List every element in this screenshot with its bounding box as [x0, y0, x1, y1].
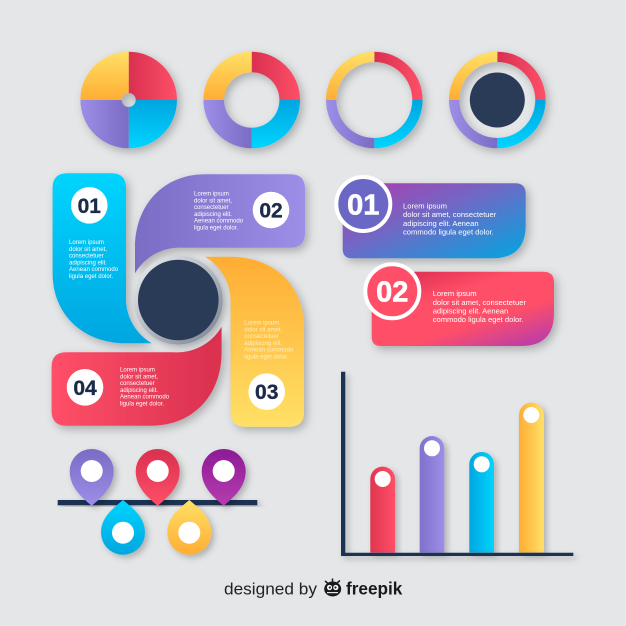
text: petal 01: consectetuer [69, 254, 104, 260]
panel text: dolor sit amet, consectetuer [403, 210, 497, 219]
text: petal 02: adipiscing elit. [194, 212, 232, 218]
badge 02: 02 [259, 200, 283, 222]
number badge [336, 177, 390, 231]
text: petal 03: Lorem ipsum [244, 320, 279, 326]
footer credit [224, 578, 403, 598]
bar: red [370, 467, 395, 552]
drop: blue [101, 500, 145, 555]
text: petal 02: Aenean commodo [194, 219, 244, 225]
badge 04: 04 [73, 377, 97, 400]
text: petal 04: dolor sit amet, [120, 374, 158, 380]
pinwheel chart [52, 173, 305, 427]
bar chart [341, 372, 573, 556]
donut 1: pie with small hole [80, 52, 177, 148]
text: petal 04: consectetuer [120, 381, 155, 387]
text: petal 03: dolor sit amet, [244, 327, 283, 333]
label panel 02 [365, 264, 554, 346]
panel text: Lorem ipsum [433, 289, 477, 298]
panel text: dolor sit amet, consectetuer [433, 298, 526, 307]
text: petal 02: dolor sit amet, [194, 198, 232, 204]
label panel 01 [336, 177, 526, 258]
petal 04: red [52, 327, 222, 426]
bar: blue [469, 452, 494, 552]
bar: purple [420, 436, 444, 552]
text: petal 04: adipiscing elit. [120, 388, 158, 394]
badge 03: 03 [255, 381, 278, 404]
axes [341, 372, 573, 556]
pin: violet [202, 449, 246, 506]
icon: freepik bee logo [324, 578, 341, 596]
text: petal 03: Aenean commodo [244, 348, 294, 354]
number badge: 02 [376, 277, 408, 309]
text: petal 04: ligula eget dolor. [120, 401, 164, 407]
donut 4: thin ring with dark centre [449, 52, 546, 148]
badge 01: 01 [78, 195, 101, 218]
freepik wordmark: freepik [346, 578, 403, 598]
text: petal 03: ligula eget dolor. [244, 354, 289, 360]
text: petal 02: ligula eget dolor. [194, 225, 238, 231]
text: petal 02: Lorem ipsum [194, 192, 229, 198]
text: petal 01: dolor sit amet, [69, 247, 107, 253]
text: petal 01: Lorem ipsum [69, 240, 104, 246]
text: petal 01: ligula eget dolor. [69, 274, 113, 280]
text: petal 04: Aenean commodo [120, 395, 170, 401]
badge 04 [67, 369, 103, 406]
timeline bar [58, 500, 257, 505]
donut 2: thick ring [203, 52, 300, 148]
donut 3: thin ring [326, 52, 423, 148]
designed by text: designed by [224, 580, 318, 598]
panel text: Lorem ipsum [403, 202, 447, 210]
badge 01 [71, 187, 108, 224]
bar: yellow [519, 403, 544, 552]
petal 01: blue [53, 173, 152, 343]
text: petal 02: consectetuer [194, 205, 229, 211]
text: petal 04: Lorem ipsum [120, 368, 155, 374]
pin: red [136, 449, 180, 506]
panel shape [372, 272, 554, 346]
petal 02: purple [135, 174, 305, 273]
number badge: 01 [347, 189, 379, 221]
text: petal 01: Aenean commodo [69, 267, 119, 273]
number badge [365, 264, 419, 318]
panel text: adipiscing elit. Aenean [403, 219, 479, 228]
petal 03: yellow [205, 257, 304, 427]
centre hub [134, 256, 223, 344]
drop: yellow [167, 500, 211, 555]
panel text: commodo ligula eget dolor. [433, 315, 523, 324]
map pin timeline [58, 449, 257, 555]
text: petal 03: adipiscing elit. [244, 341, 283, 347]
pin: purple [70, 449, 114, 506]
badge 02 [253, 192, 289, 228]
panel text: adipiscing elit. Aenean [433, 306, 508, 316]
badge 03 [248, 373, 285, 410]
text: petal 01: adipiscing elit. [69, 260, 107, 266]
panel shape [343, 183, 526, 258]
text: petal 03: consectetuer [244, 334, 279, 340]
panel text: commodo ligula eget dolor. [403, 228, 494, 236]
